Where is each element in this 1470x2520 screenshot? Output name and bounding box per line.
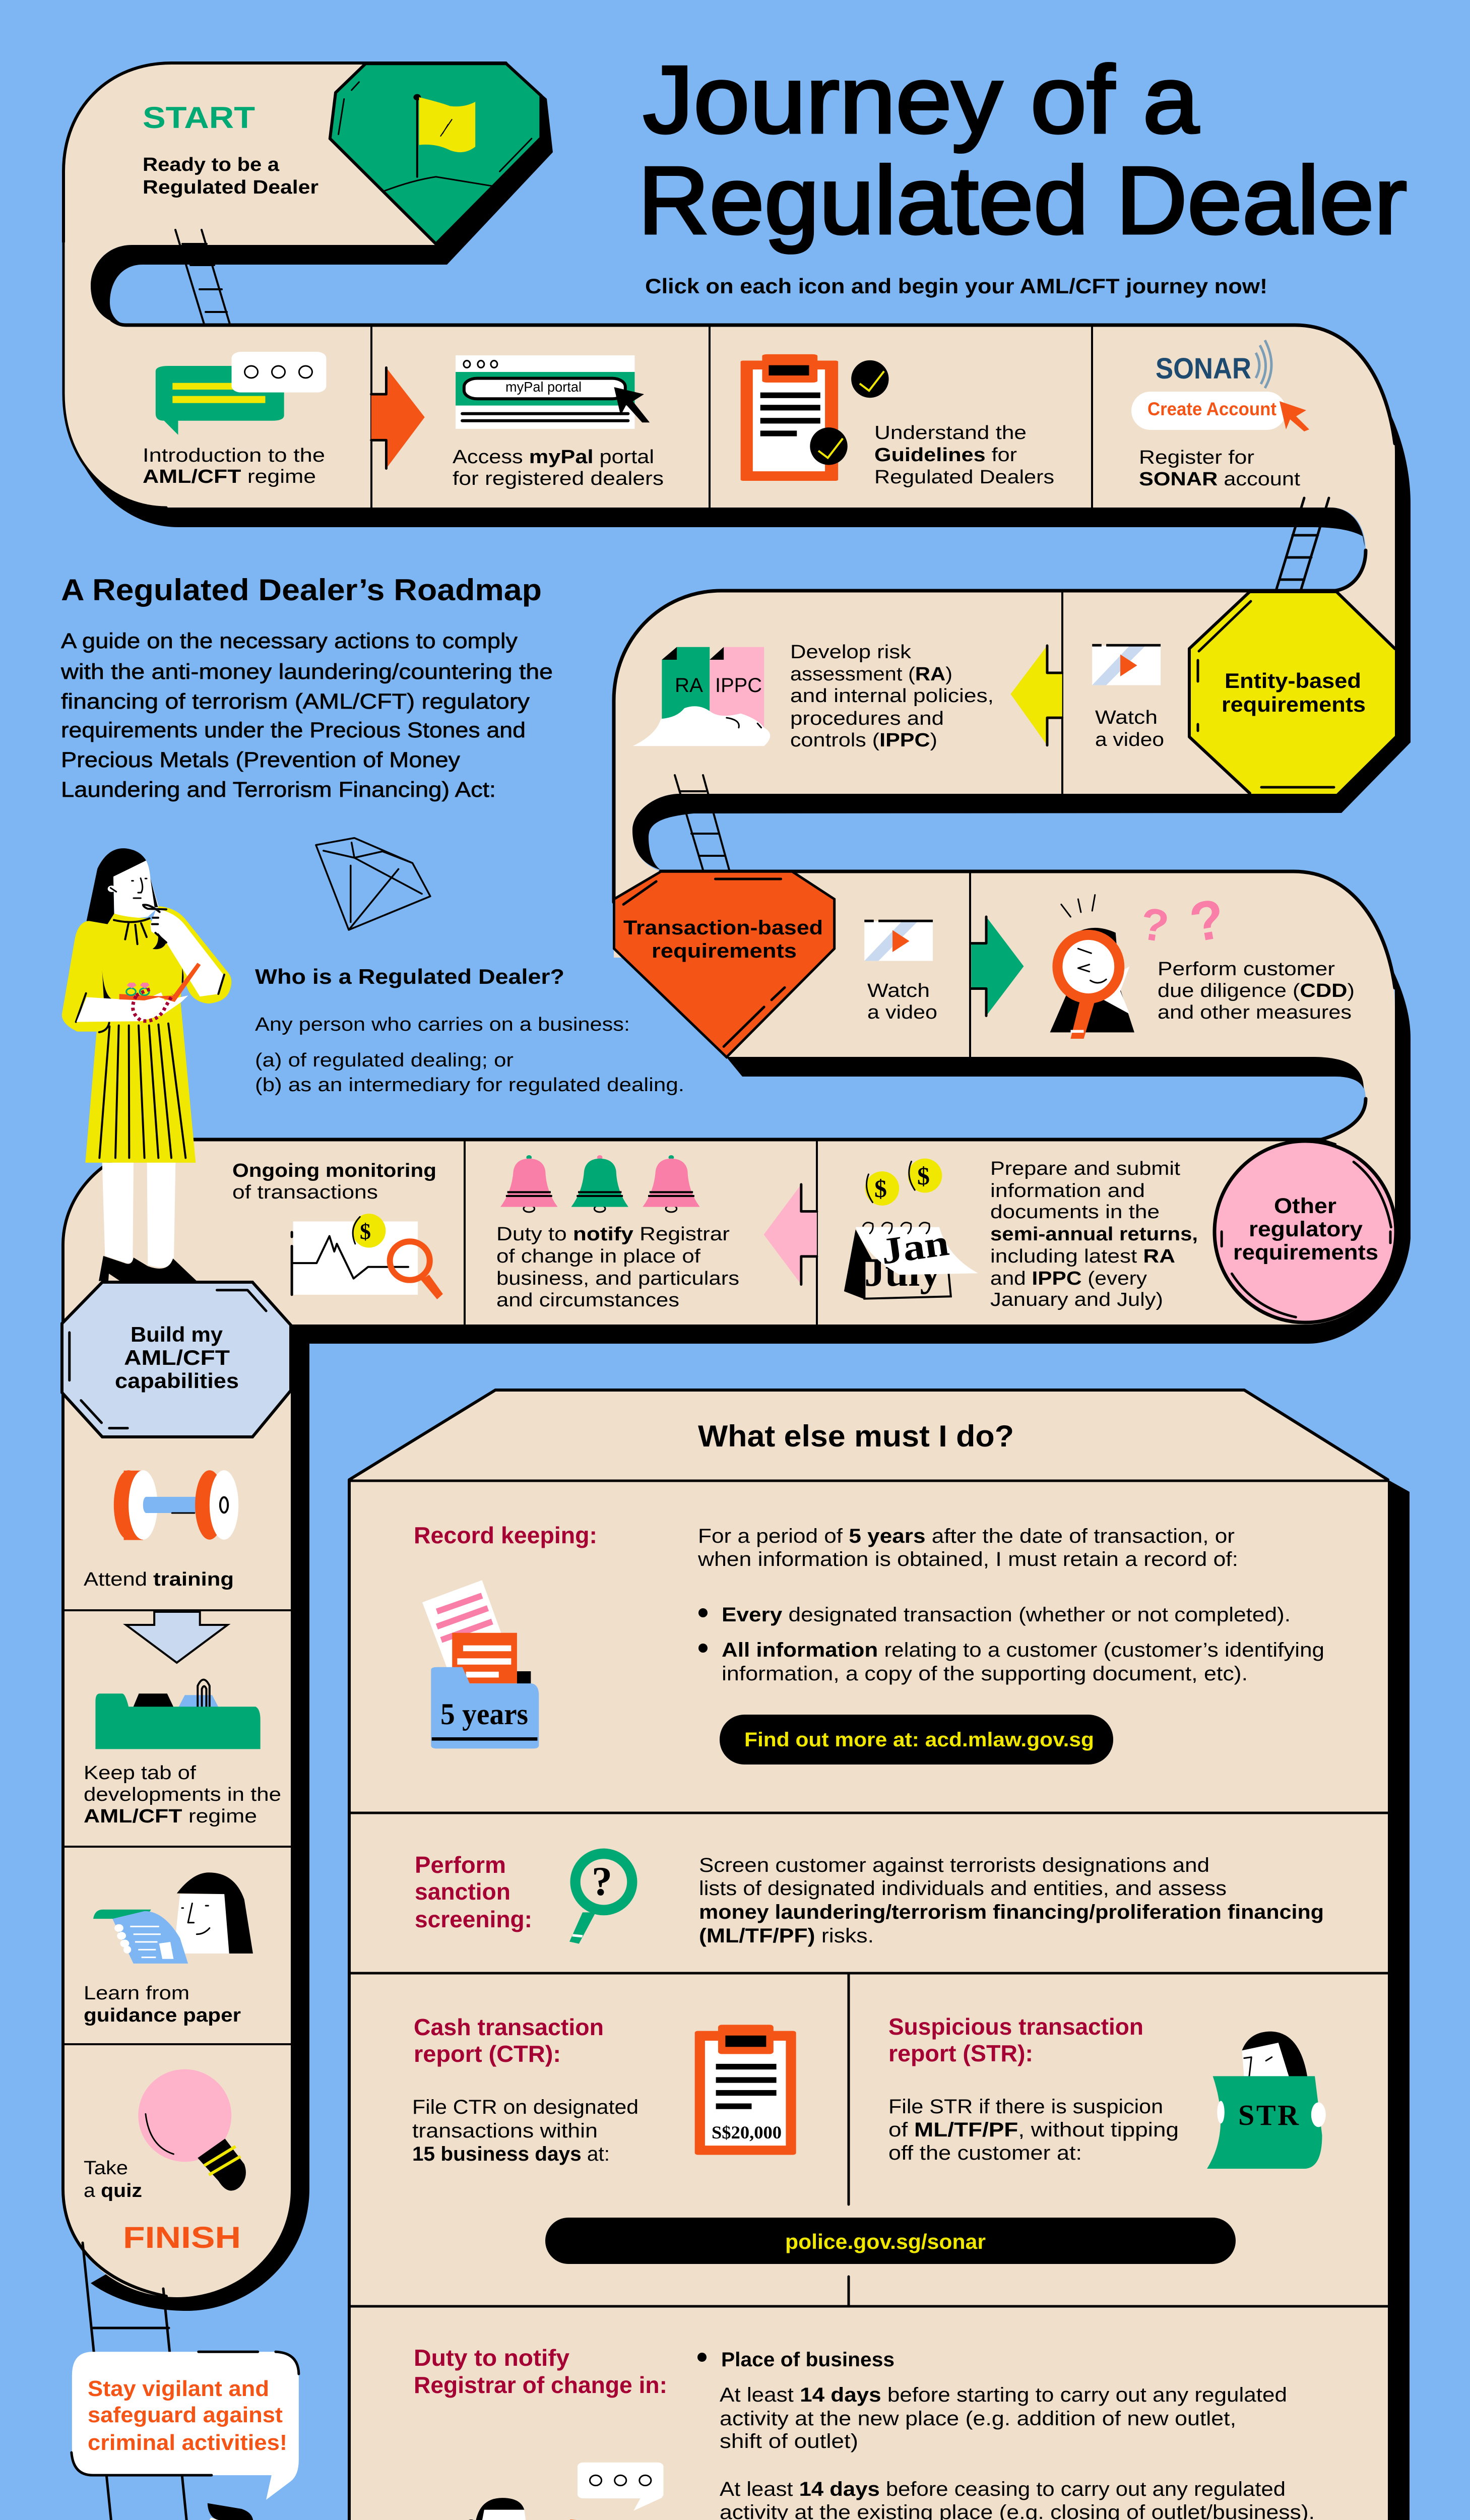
text: develop risk assessment	[790, 642, 994, 751]
heading: STR: report (STR):	[888, 2040, 1033, 2066]
callout: stay vigilant speech bubble	[72, 2352, 299, 2500]
text: learn from guidance paper: guidance paper	[84, 2005, 241, 2026]
heading: CTR: report (CTR):	[414, 2041, 561, 2067]
text: take a quiz: a quiz	[84, 2180, 142, 2201]
text: duty to notify registrar: Duty to notify Registrar	[496, 1224, 730, 1245]
text: register SONAR	[1139, 447, 1300, 490]
panel: row 1 steps	[143, 340, 1309, 490]
title	[638, 46, 1407, 254]
text: semi-annual returns: including latest RA	[990, 1246, 1175, 1267]
icon: myPal browser: myPal portal	[505, 379, 582, 395]
text: roadmap description: requirements under the Precious Stones and	[61, 718, 526, 742]
text: ongoing monitoring	[232, 1160, 436, 1203]
icon: orange hexagon transaction-based requirements: requirements	[652, 940, 797, 962]
icon: RA IPPC documents: IPPC	[715, 674, 762, 697]
icon: transaction chart with magnifier	[292, 1214, 443, 1299]
icon: man with phone and laptop	[420, 2463, 664, 2520]
heading: perform sanction screening: sanction	[415, 1878, 510, 1905]
heading: roadmap: A Regulated Dealer’s Roadmap	[61, 573, 542, 607]
text: watch a video: a video	[1095, 729, 1164, 750]
text: CTR description: transactions within	[412, 2120, 598, 2142]
text: register SONAR: SONAR account	[1139, 469, 1300, 490]
icon: 5 years folder	[422, 1580, 539, 1748]
text: watch a video: Watch	[867, 980, 930, 1001]
text: roadmap description: with the anti-money laundering/countering the	[60, 660, 553, 684]
text: who is a regulated dealer	[255, 965, 684, 1096]
heading: CTR: Cash transaction	[414, 2014, 604, 2040]
list: record items	[698, 1604, 1324, 1685]
icon: reader with guidance paper	[93, 1872, 253, 1964]
icon: SONAR create account	[1131, 340, 1309, 431]
callout: stay vigilant speech bubble: Stay vigilant and	[88, 2376, 269, 2401]
text: record retention: For a period of 5 years after the date of transaction, or	[698, 1525, 1235, 1547]
text: register SONAR: Register for	[1139, 447, 1254, 468]
text: who is a regulated dealer: Who is a Regulated Dealer?	[255, 965, 564, 988]
text: duty to notify registrar: of change in place of	[496, 1246, 701, 1267]
list: duty items: activity at the new place (e.g. addition of new outlet,	[720, 2408, 1236, 2430]
icon: yellow octagon entity-based requirements: requirements	[1222, 692, 1366, 716]
section: record keeping	[414, 1522, 1324, 1765]
icon: yellow octagon entity-based requirements: Entity-based	[1225, 669, 1361, 692]
heading: duty to notify registrar	[414, 2345, 667, 2398]
icon: orange hexagon transaction-based requirements	[614, 871, 835, 1057]
text: who is a regulated dealer: (a) of regulated dealing; or	[255, 1050, 514, 1071]
arrow: yellow left	[1010, 646, 1062, 745]
icon: folder tabs	[95, 1680, 261, 1749]
list: duty items: Place of business	[721, 2349, 894, 2371]
list: record items: All information relating to a customer (customer’s identifying	[722, 1639, 1324, 1661]
text: keep tab: AML/CFT regime	[84, 1806, 257, 1827]
icon: S$20,000 clipboard	[695, 2025, 796, 2155]
text: ongoing monitoring: of transactions	[232, 1182, 378, 1203]
button: find out more	[720, 1715, 1113, 1765]
button: find out more: Find out more at: acd.mlaw.gov.sg	[744, 1729, 1094, 1751]
icon: quiz bulb	[138, 2069, 246, 2191]
panel: build capabilities column	[62, 1282, 291, 2254]
panel: row 2 entity-based	[633, 592, 1395, 794]
text: roadmap description: Laundering and Terrorism Financing) Act:	[61, 778, 496, 802]
text: STR description	[888, 2096, 1179, 2164]
text: screening description: money laundering/terrorism financing/proliferation financing	[699, 1901, 1324, 1923]
icon: RA IPPC documents	[633, 647, 770, 746]
heading: perform sanction screening	[415, 1852, 532, 1932]
icon: myPal browser	[456, 355, 650, 429]
list: duty items: At least 14 days before starting to carry out any regulated	[720, 2384, 1287, 2406]
text: keep tab: Keep tab of	[84, 1762, 196, 1784]
icon: coins and calendar: $	[917, 1162, 930, 1190]
section: duty to notify	[414, 2345, 1315, 2520]
icon: customer under magnifier: ?	[1137, 899, 1172, 952]
text: customer due diligence	[1158, 959, 1355, 1023]
list: duty items: At least 14 days before ceasing to carry out any regulated	[720, 2478, 1286, 2500]
icon: woman holding jewellery	[62, 848, 231, 1282]
button: police.gov.sg/sonar	[545, 2218, 1236, 2264]
text: STR description: off the customer at:	[888, 2142, 1082, 2164]
text: guidelines: Regulated Dealers	[874, 467, 1054, 488]
heading: perform sanction screening: screening:	[415, 1906, 532, 1932]
text: semi-annual returns: semi-annual returns,	[990, 1224, 1198, 1245]
start text: Ready to be a	[143, 154, 280, 175]
text: screening description: Screen customer against terrorists designations and	[699, 1854, 1209, 1876]
heading: duty to notify registrar: Duty to notify	[414, 2345, 569, 2371]
list: record items: information, a copy of the supporting document, etc).	[722, 1663, 1248, 1685]
text: screening description	[699, 1854, 1324, 1947]
icon: coins and calendar: Jan	[878, 1222, 951, 1273]
text: keep tab	[84, 1762, 281, 1827]
text: screening description: (ML/TF/PF) risks.	[699, 1925, 874, 1947]
text: develop risk assessment: and internal policies,	[790, 685, 994, 707]
icon: man climbing ladder	[105, 2503, 307, 2520]
icon: yellow octagon entity-based requirements	[1189, 592, 1395, 794]
text: learn from guidance paper: Learn from	[84, 1983, 189, 2004]
text: customer due diligence: due diligence ( CDD )	[1158, 980, 1355, 1001]
text: semi-annual returns: information and	[990, 1180, 1145, 1202]
icon: green flag hexagon	[330, 64, 541, 244]
text: who is a regulated dealer: (b) as an intermediary for regulated dealing.	[255, 1075, 684, 1096]
text: introduction: AML/CFT regime	[143, 466, 316, 487]
icon: green magnifier with question mark: ?	[592, 1858, 612, 1904]
text: develop risk assessment: Develop risk	[790, 642, 912, 663]
text: watch a video	[867, 980, 937, 1023]
text: develop risk assessment: controls ( IPPC )	[790, 730, 937, 751]
icon: octagon build my AML/CFT capabilities: AML/CFT	[124, 1346, 230, 1369]
section: suspicious transaction report	[888, 2013, 1326, 2169]
text: access myPal: for registered dealers	[453, 468, 664, 489]
icon: person behind STR paper: STR	[1238, 2099, 1299, 2131]
text: CTR description	[412, 2096, 638, 2165]
text: duty to notify registrar	[496, 1224, 739, 1311]
text: take a quiz	[84, 2158, 142, 2201]
button: police.gov.sg/sonar: police.gov.sg/sonar	[785, 2230, 986, 2253]
text: CTR description: 15 business days at:	[412, 2143, 610, 2165]
panel: row 3 transaction-based	[614, 871, 1355, 1057]
arrow: light blue down	[126, 1612, 228, 1663]
callout: stay vigilant speech bubble: safeguard against	[88, 2403, 283, 2427]
text: STR description: of ML/TF/PF , without tipping	[888, 2119, 1179, 2141]
icon: customer under magnifier	[1050, 887, 1229, 1039]
start text	[143, 154, 318, 198]
icon: training weights	[114, 1470, 238, 1540]
text: record retention: when information is obtained, I must retain a record of:	[697, 1548, 1238, 1570]
panel: what else must I do	[349, 1390, 1410, 2520]
text: keep tab: developments in the	[84, 1784, 281, 1805]
text: watch a video	[1095, 707, 1164, 750]
text: roadmap description: financing of terrorism (AML/CFT) regulatory	[61, 689, 530, 714]
icon: green magnifier with question mark	[569, 1849, 637, 1944]
heading: STR	[888, 2013, 1143, 2066]
heading: duty to notify registrar: Registrar of change in:	[414, 2372, 667, 2398]
text: semi-annual returns: and IPPC (every	[990, 1268, 1147, 1289]
heading: what else must I do: What else must I do?	[698, 1419, 1014, 1453]
icon: customer under magnifier: ?	[1185, 887, 1229, 954]
text: STR description: File STR if there is suspicion	[888, 2096, 1163, 2118]
text: duty to notify registrar: business, and particulars	[496, 1268, 739, 1289]
icon: video	[864, 921, 933, 961]
text: CTR description: File CTR on designated	[412, 2096, 638, 2118]
text: take a quiz: Take	[84, 2158, 128, 2179]
heading: CTR	[414, 2014, 604, 2067]
finish label: FINISH	[123, 2221, 241, 2254]
heading: perform sanction screening: Perform	[415, 1852, 506, 1878]
text: semi-annual returns: January and July)	[990, 1289, 1163, 1310]
subtitle: Click on each icon and begin your AML/CFT journey now!	[645, 274, 1267, 298]
text: semi-annual returns	[990, 1158, 1198, 1310]
section: sanction screening	[415, 1849, 1324, 1947]
icon: coins and calendar	[844, 1159, 978, 1299]
icon: three bells	[500, 1155, 700, 1212]
text: duty to notify registrar: and circumstances	[496, 1290, 679, 1311]
panel shape and dividers	[349, 1390, 1410, 2520]
arrow: orange right	[371, 368, 425, 468]
title: Journey of a	[643, 46, 1199, 153]
text: record retention	[697, 1525, 1238, 1570]
text: watch a video: a video	[867, 1002, 937, 1023]
icon: coins and calendar: July	[864, 1250, 941, 1295]
text: roadmap description: Precious Metals (Prevention of Money	[61, 748, 461, 772]
list: duty items	[697, 2349, 1315, 2520]
start label: START	[143, 101, 255, 135]
ladder: finish to ground	[83, 2243, 230, 2520]
text: introduction: Introduction to the	[143, 445, 325, 466]
text: semi-annual returns: Prepare and submit	[990, 1158, 1180, 1179]
list: duty items: shift of outlet)	[720, 2430, 858, 2452]
icon: RA IPPC documents: RA	[675, 674, 703, 697]
text: guidelines: Guidelines for	[874, 445, 1017, 466]
icon: octagon build my AML/CFT capabilities: Build my	[131, 1322, 223, 1346]
panel: row 4 other regulatory requirements	[232, 1141, 1396, 1322]
title: Regulated Dealer	[638, 147, 1407, 254]
icon: person behind STR paper	[1207, 2032, 1326, 2169]
text: guidelines	[874, 422, 1054, 488]
text: access myPal: Access myPal portal	[453, 447, 654, 468]
text: screening description: lists of designated individuals and entities, and assess	[699, 1877, 1227, 1900]
text: develop risk assessment: procedures and	[790, 708, 944, 729]
list: record items: Every designated transaction (whether or not completed).	[722, 1604, 1291, 1626]
icon: octagon build my AML/CFT capabilities	[62, 1282, 291, 1437]
ladders between rows	[175, 230, 1329, 870]
text: develop risk assessment: assessment ( RA)	[790, 664, 952, 685]
arrow: pink left	[764, 1184, 817, 1285]
icon: 5 years folder: 5 years	[440, 1697, 528, 1731]
icon: pink circle other regulatory requirements	[1215, 1141, 1396, 1322]
text: customer due diligence: and other measures	[1158, 1002, 1352, 1023]
icon: orange hexagon transaction-based requirements: Transaction-based	[623, 917, 823, 939]
text: customer due diligence: Perform customer	[1158, 959, 1335, 980]
text: access myPal	[453, 447, 664, 489]
text: guidelines: Understand the	[874, 422, 1027, 444]
text: roadmap description: A guide on the necessary actions to comply	[61, 629, 518, 653]
text: watch a video: Watch	[1095, 707, 1158, 728]
text: attend training: Attend training	[84, 1569, 234, 1590]
icon: octagon build my AML/CFT capabilities: capabilities	[115, 1369, 239, 1393]
icon: video	[1092, 645, 1161, 685]
icon: diamond outline	[316, 838, 430, 930]
icon: guidelines clipboard	[741, 354, 889, 481]
start text: Regulated Dealer	[143, 177, 318, 198]
panel: start	[143, 64, 541, 244]
section: cash transaction report	[412, 2014, 796, 2165]
arrow: green right	[971, 917, 1024, 1016]
text: learn from guidance paper	[84, 1983, 241, 2026]
icon: pink circle other regulatory requirements: regulatory	[1249, 1217, 1363, 1241]
text: who is a regulated dealer: Any person who carries on a business:	[255, 1014, 630, 1035]
text: semi-annual returns: documents in the	[990, 1202, 1160, 1223]
heading: STR: Suspicious transaction	[888, 2013, 1143, 2040]
icon: SONAR create account: Create Account	[1147, 399, 1276, 419]
icon: transaction chart with magnifier: $	[360, 1219, 371, 1244]
icon: S$20,000 clipboard: S$20,000	[712, 2122, 782, 2143]
icon: pink circle other regulatory requirements: Other	[1274, 1194, 1336, 1218]
text: roadmap description	[60, 629, 553, 802]
heading: record keeping: Record keeping:	[414, 1522, 597, 1548]
text: introduction	[143, 445, 325, 487]
icon: chat bubbles	[156, 352, 326, 435]
callout: stay vigilant speech bubble: criminal activities!	[88, 2430, 287, 2455]
icon: SONAR create account: SONAR	[1156, 352, 1251, 385]
icon: coins and calendar: $	[874, 1174, 887, 1203]
text: ongoing monitoring: Ongoing monitoring	[232, 1160, 436, 1181]
icon: pink circle other regulatory requirements: requirements	[1233, 1240, 1378, 1265]
